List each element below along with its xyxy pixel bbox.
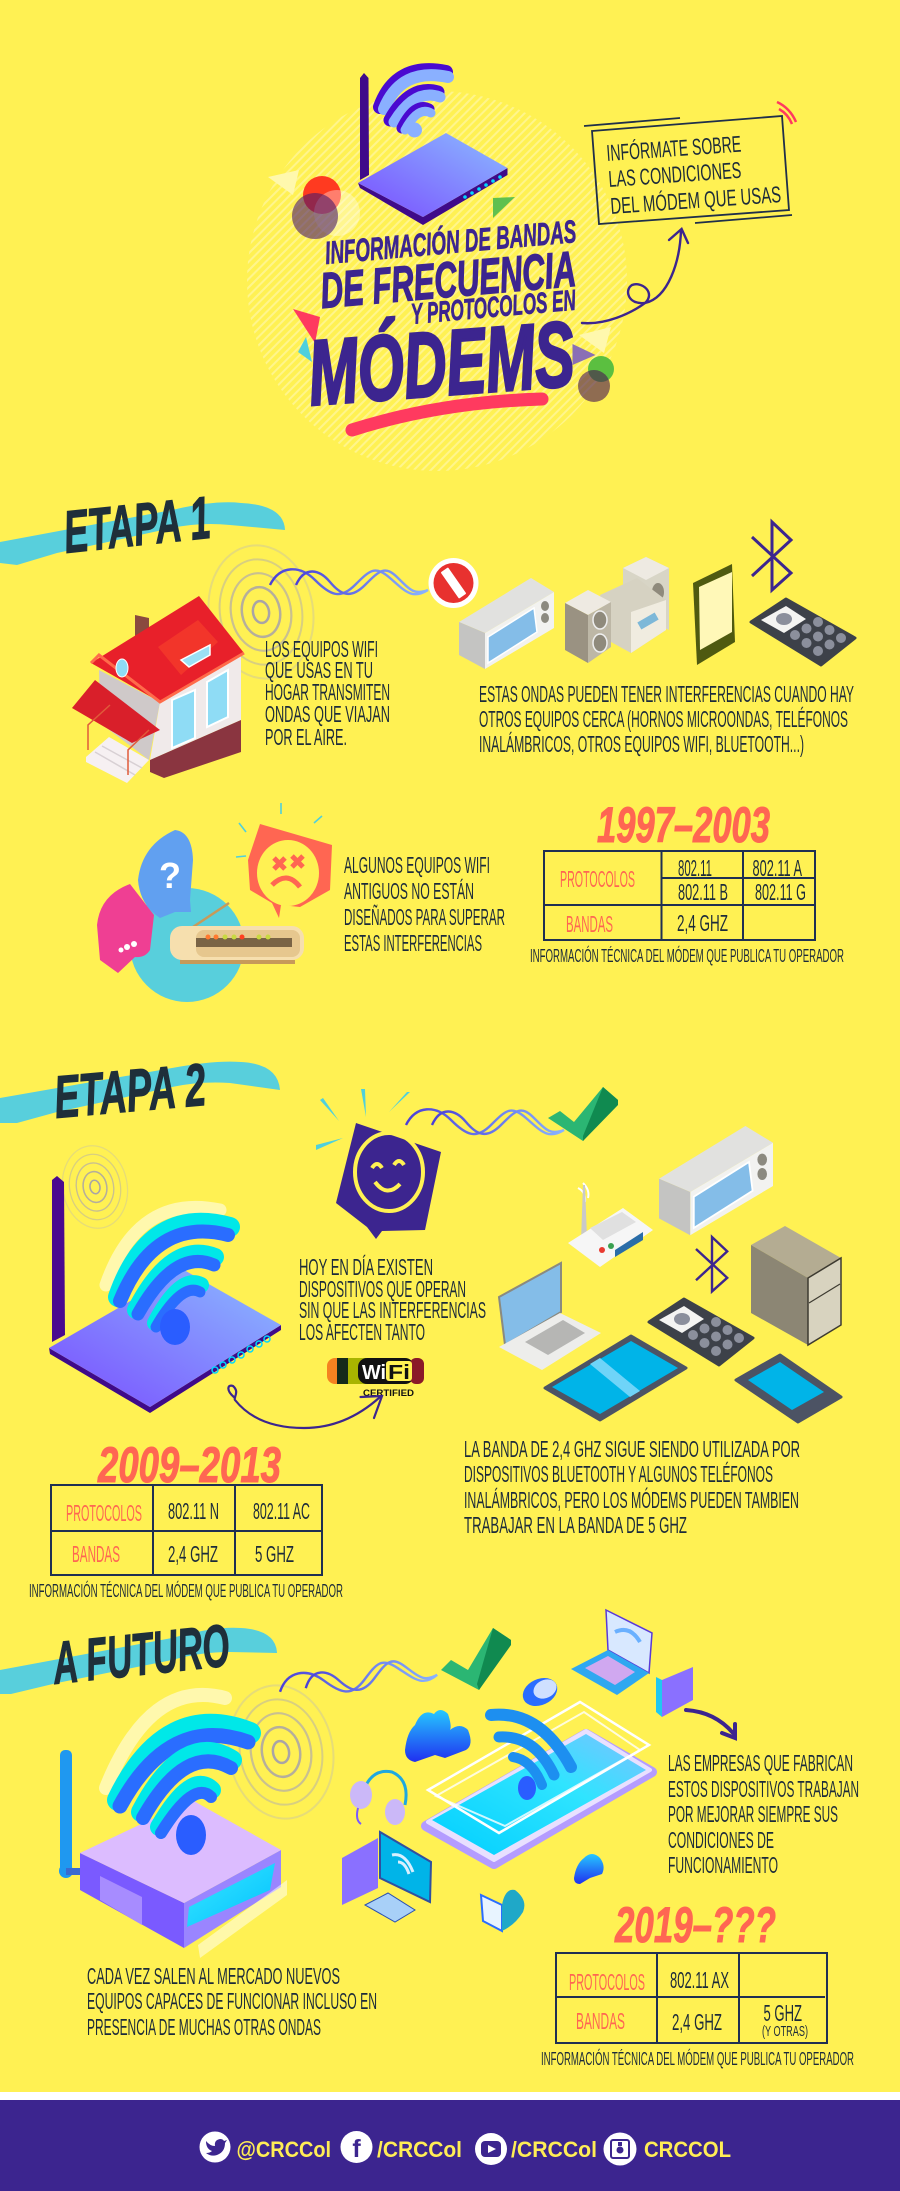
table: a futuro: BANDAS — [576, 2008, 625, 2034]
caption: etapa 2 table: INFORMACIÓN TÉCNICA DEL MÓDEM QUE PUBLICA TU OPERADOR — [29, 1580, 343, 1601]
icon: microwave — [459, 578, 554, 669]
icon: waves — [270, 569, 428, 594]
icon: wifi certified logo: CERTIFIED — [363, 1388, 415, 1398]
text: las empresas: FUNCIONAMIENTO — [668, 1852, 778, 1878]
callout: infórmate box: INFÓRMATE SOBRE — [606, 131, 742, 166]
table: a futuro: 5 GHZ — [764, 2000, 802, 2026]
icon: no sign — [428, 558, 478, 608]
title: Y PROTOCOLOS EN — [410, 285, 578, 331]
icon: keypad phone — [751, 599, 855, 665]
text: equipos wifi: POR EL AIRE. — [265, 724, 347, 750]
table: etapa 1: 802.11 G — [755, 879, 806, 905]
icon: big cloud — [405, 1710, 471, 1762]
text: equipos antiguos: ALGUNOS EQUIPOS WIFI — [344, 852, 490, 878]
text: hoy en dia: HOY EN DÍA EXISTEN — [299, 1254, 433, 1280]
icon: future smartphone with wifi — [426, 1702, 652, 1864]
icon: facebook — [340, 2131, 372, 2163]
table: a futuro: (Y OTRAS) — [762, 2023, 808, 2040]
table: etapa 2: 802.11 N — [168, 1498, 219, 1524]
text: las empresas: CONDICIONES DE — [668, 1827, 774, 1853]
table: etapa 2: BANDAS — [72, 1541, 120, 1567]
icon: shield tile — [481, 1890, 524, 1931]
title — [305, 213, 578, 425]
table: a futuro — [556, 1953, 827, 2043]
text: equipos wifi: ONDAS QUE VIAJAN — [265, 701, 390, 727]
icon: server — [656, 1667, 693, 1717]
icon: mouse — [518, 1673, 562, 1711]
text: equipos wifi: HOGAR TRANSMITEN — [265, 679, 390, 705]
header illustration and title — [247, 70, 627, 471]
icon: big router with wifi — [49, 1176, 281, 1413]
icon: white router — [568, 1183, 653, 1267]
text: interferencias — [479, 681, 854, 757]
table: etapa 1: 802.11 B — [678, 879, 728, 905]
icon: house — [72, 596, 244, 783]
heading: 2009-2013: 2009–2013 — [97, 1437, 281, 1493]
handle: twitter: @CRCCol — [236, 2137, 331, 2162]
text: cada vez: CADA VEZ SALEN AL MERCADO NUEVOS — [87, 1963, 340, 1989]
title: DE FRECUENCIA — [318, 241, 578, 319]
icon: stereo — [565, 557, 669, 663]
text: equipos wifi — [265, 636, 390, 750]
icon: keypad phone — [649, 1299, 753, 1365]
table: etapa 1: PROTOCOLOS — [560, 866, 635, 892]
icon: small signal rings — [56, 1140, 134, 1234]
text: las empresas — [668, 1750, 859, 1878]
handle: youtube: /CRCCol — [511, 2137, 597, 2162]
illustration: confused devices and radio — [97, 803, 332, 1002]
icon: instagram — [604, 2132, 636, 2166]
text: hoy en dia — [299, 1254, 486, 1345]
table: etapa 2: 2,4 GHZ — [168, 1541, 218, 1567]
callout: infórmate box: DEL MÓDEM QUE USAS — [610, 181, 782, 219]
icon: headphones — [350, 1771, 406, 1825]
icon: waves — [406, 1109, 564, 1134]
table: etapa 1: 2,4 GHZ — [677, 910, 728, 936]
icon: small cloud — [574, 1854, 604, 1884]
handle: facebook: /CRCCol — [377, 2137, 462, 2162]
icon: purple router with wifi — [358, 70, 508, 225]
icon: tablet — [545, 1336, 686, 1420]
icon: sad face bubble — [236, 803, 332, 918]
decorative shapes left — [268, 170, 515, 362]
text: hoy en dia: LOS AFECTEN TANTO — [299, 1319, 425, 1345]
title underline — [352, 399, 542, 430]
footer — [0, 2092, 900, 2191]
icon: blue bubble — [138, 830, 193, 918]
table: etapa 1: BANDAS — [566, 911, 613, 937]
table: a futuro: 2,4 GHZ — [672, 2009, 722, 2035]
section: a futuro heading — [0, 1612, 277, 1697]
text: equipos wifi: QUE USAS EN TU — [265, 657, 373, 683]
title: MÓDEMS — [305, 303, 578, 425]
icon: wifi certified logo: Wi — [362, 1362, 386, 1384]
icon: waves — [278, 1654, 438, 1701]
text: hoy en dia: SIN QUE LAS INTERFERENCIAS — [299, 1297, 486, 1323]
icon: green check — [441, 1628, 511, 1690]
text: equipos wifi: LOS EQUIPOS WIFI — [265, 636, 378, 662]
icon: pink bubble — [97, 884, 154, 973]
table: etapa 2 — [51, 1485, 322, 1575]
icon: happy face bubble — [316, 1089, 441, 1239]
table: etapa 2: 5 GHZ — [255, 1541, 294, 1567]
icon: bluetooth — [696, 1237, 727, 1291]
icon: small phone — [736, 1355, 841, 1422]
icon: microwave — [659, 1126, 773, 1235]
text: equipos antiguos: DISEÑADOS PARA SUPERAR — [344, 904, 505, 930]
title: INFORMACIÓN DE BANDAS — [323, 213, 578, 271]
hatched backdrop circle — [247, 91, 627, 471]
icon: twitter — [200, 2132, 230, 2162]
text: banda 2,4 — [464, 1436, 800, 1538]
text: cada vez: PRESENCIA DE MUCHAS OTRAS ONDAS — [87, 2014, 321, 2040]
icon: laptop — [499, 1263, 601, 1370]
icon: green check — [548, 1087, 618, 1141]
icon: signal rings — [198, 537, 324, 687]
text: equipos antiguos: ANTIGUOS NO ESTÁN — [344, 878, 474, 904]
icon: blue bubble: ? — [159, 855, 181, 896]
icon: signal rings — [218, 1677, 344, 1827]
arrow: to wifi logo — [228, 1386, 382, 1428]
icon: wifi certified logo: Fi — [388, 1362, 410, 1384]
icon: facebook: f — [352, 2135, 361, 2163]
section: a futuro heading: A FUTURO — [48, 1612, 232, 1697]
heading: 2019-???: 2019–??? — [614, 1897, 776, 1953]
text: equipos antiguos: ESTAS INTERFERENCIAS — [344, 930, 482, 956]
table: etapa 1: 802.11 A — [752, 855, 802, 881]
callout: infórmate box — [584, 102, 796, 224]
text: cada vez — [87, 1963, 377, 2040]
section: etapa 1 heading: ETAPA 1 — [60, 484, 214, 566]
table: etapa 2: PROTOCOLOS — [66, 1500, 142, 1526]
icon: bluetooth — [752, 522, 791, 590]
table: a futuro: 802.11 AX — [670, 1967, 729, 1993]
section: etapa 1 heading — [0, 484, 285, 566]
table: etapa 2: 802.11 AC — [253, 1498, 310, 1524]
handle: instagram: CRCCOL — [644, 2137, 731, 2162]
text: equipos antiguos — [344, 852, 505, 956]
table: etapa 1 — [544, 851, 815, 940]
icon: youtube — [475, 2133, 507, 2165]
icon: lilac router with wifi — [59, 1695, 287, 1958]
callout: infórmate box: LAS CONDICIONES — [608, 157, 742, 192]
icon: wifi certified logo — [327, 1358, 424, 1398]
icon: desktop computer — [342, 1832, 431, 1922]
text: banda 2,4: TRABAJAR EN LA BANDA DE 5 GHZ — [464, 1512, 687, 1538]
table: etapa 1: 802.11 — [678, 855, 712, 881]
arrow: from title to callout — [582, 229, 688, 323]
icon: radio — [170, 903, 304, 964]
text: hoy en dia: DISPOSITIVOS QUE OPERAN — [299, 1276, 466, 1302]
decorative shapes right — [572, 327, 614, 402]
icon: purple laptop — [571, 1610, 652, 1695]
section: etapa 2 heading: ETAPA 2 — [51, 1051, 209, 1131]
icon: pc tower — [751, 1226, 841, 1345]
icon: smartphone — [693, 564, 735, 665]
table: a futuro: PROTOCOLOS — [569, 1969, 645, 1995]
text: cada vez: EQUIPOS CAPACES DE FUNCIONAR INCLUSO EN — [87, 1988, 377, 2014]
arrow: to text — [686, 1710, 735, 1738]
heading: 1997-2003: 1997–2003 — [597, 797, 770, 853]
